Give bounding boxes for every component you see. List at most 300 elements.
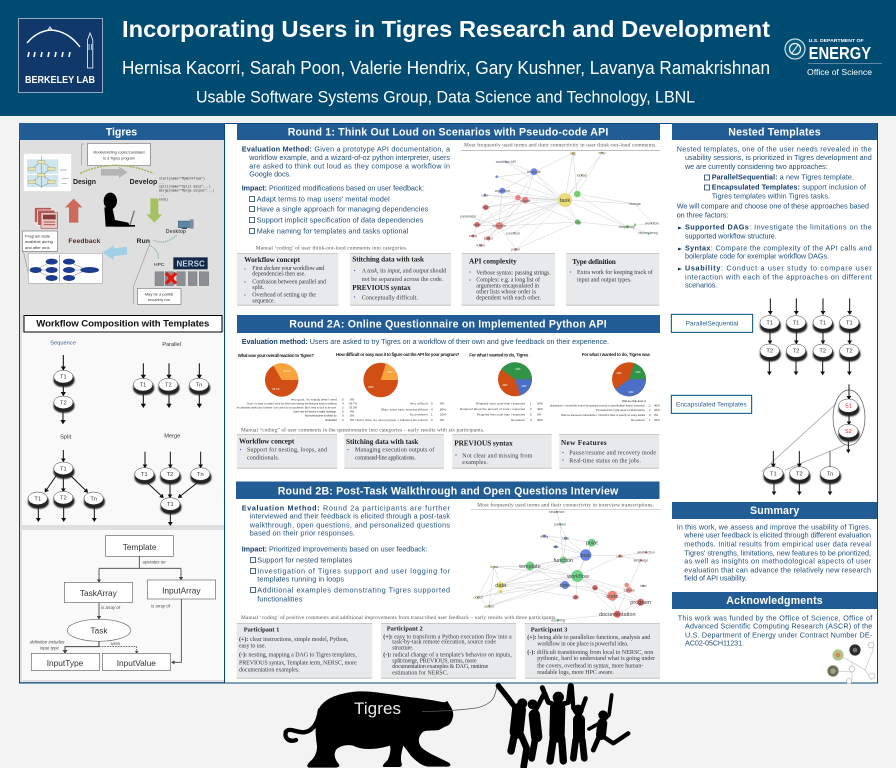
card: Type definition: Type definition xyxy=(572,258,616,266)
rope from tiger to users xyxy=(422,686,497,712)
text: impact 2B: Investigation of Tigres support and user logging for xyxy=(257,567,451,576)
text: impact 2B: Support for nested templates xyxy=(257,556,353,565)
chart: overall reaction pie: 0 xyxy=(342,418,344,422)
network graph: think-out-loud terms: workflow xyxy=(645,222,659,226)
relation: operates on: operates on xyxy=(143,559,166,564)
relation: definition includes input type: definition includes xyxy=(30,639,65,644)
pattern: Merge: T1 xyxy=(141,472,148,478)
chart: overall reaction pie: 0 xyxy=(342,410,344,414)
pattern: Encapsulated Templates: T1 xyxy=(770,471,777,477)
pattern: Split: Tn xyxy=(90,496,97,502)
box: ParallelSequential: ParallelSequential xyxy=(686,321,738,328)
text: nested templates intro: ParallelSequential: a new Tigres template. xyxy=(712,173,854,182)
heading: Round 2B: Round 2B: Post-Task Walkthrough and Open Questions Interview xyxy=(278,485,619,497)
text: impact: Have a single approach for managing dependencies xyxy=(257,205,429,214)
network graph: think-out-loud terms: example xyxy=(493,224,506,228)
code snippet: ... xyxy=(159,180,165,184)
heading: Round 2A xyxy=(237,315,660,333)
chart: code amount pie: 40% xyxy=(502,383,508,387)
chart: code amount pie: 40% xyxy=(537,418,543,422)
network graph: interview terms: template xyxy=(519,564,541,570)
card: Participant 2: (+): easy to transform a Python execution flow into a xyxy=(383,633,512,640)
chart: overall reaction pie: 0 xyxy=(342,414,344,418)
network graph: interview terms: code xyxy=(606,594,618,600)
text: funding statement: This work was funded by the Office of Science, Office of xyxy=(678,614,872,623)
network graph: think-out-loud terms: dependency xyxy=(639,231,658,235)
chart: abstraction level pie: Was too high-level of xyxy=(622,399,646,403)
chart: code amount pie: 1 xyxy=(530,402,532,406)
pattern: Merge xyxy=(135,433,211,525)
arrow: run to HPC xyxy=(149,245,158,259)
heading: Acknowledgments xyxy=(672,592,877,609)
card: Workflow concept 2A: conditionals. xyxy=(247,456,280,462)
text: nested templates intro: We will compare and choose one of these approaches based xyxy=(677,202,869,211)
text: comparison factors: scenarios. xyxy=(685,281,717,290)
card: Participant 2: Participant 2 xyxy=(387,625,423,632)
text: evaluation method 2B: interviewed and their feedback is elicited through a post-task xyxy=(250,512,450,521)
card: API complexity: other lists whose order is xyxy=(476,289,537,295)
chart: overall reaction pie: 0% xyxy=(350,398,355,402)
text: comparison factors: supported workflow structure. xyxy=(685,232,777,241)
chart: abstraction level pie: Was too low-level of abstraction: I should'nt have to specify so many details xyxy=(561,413,645,417)
text: evaluation method 2A: Evaluation method: Users are asked to try Tigres on a workflow of their own and give feedback on their experience. xyxy=(242,337,609,346)
text: impact 2B: Additional examples demonstrating Tigres supported xyxy=(257,586,450,595)
chart: API difficulty pie: Okay, some early learning difficult xyxy=(381,408,428,412)
network graph: think-out-loud terms: output xyxy=(520,199,530,203)
chart: overall reaction pie: 4 xyxy=(342,402,344,406)
chart: code amount pie: 20% xyxy=(537,402,543,406)
card: Workflow concept: dependencies then use. xyxy=(252,272,306,278)
text: impact 2B: functionalities xyxy=(257,594,303,603)
chart: API difficulty pie: 0% xyxy=(440,418,445,422)
label: Design: Design xyxy=(73,179,96,186)
card: Participant 1: PREVIOUS syntax, Template term, NERSC, more xyxy=(239,660,357,666)
chart: abstraction level pie: 40% xyxy=(654,408,660,412)
chart: code amount pie: 40% xyxy=(515,367,521,371)
text: impact 2B: templates running in loops xyxy=(257,575,344,584)
chart: code amount pie: 2 xyxy=(530,407,532,411)
network graph: interview terms: parallel xyxy=(554,522,566,526)
box: InputArray: InputArray xyxy=(162,585,201,595)
card: Participant 3: the covers, overhead in syntax, more human- xyxy=(537,664,643,670)
logo: U.S. Department of Energy: Office of Science xyxy=(807,67,872,77)
chart: API difficulty pie xyxy=(336,352,460,422)
chart: API difficulty pie: 1 xyxy=(431,412,433,416)
card: Workflow concept 2A: Workflow concept xyxy=(239,438,295,446)
relation: definition includes input type xyxy=(30,639,99,653)
chart: API difficulty pie: 0 xyxy=(431,402,433,406)
label: HPC: HPC xyxy=(154,262,165,268)
network graph: interview terms: function xyxy=(554,558,573,564)
card: Participant 3: readable logs, more HPC aware. xyxy=(537,670,614,676)
card: New Features 2A xyxy=(559,434,659,468)
code snippet: start(name="MyWorkflow") xyxy=(159,176,205,180)
person 3 xyxy=(542,686,570,761)
box: Encapsulated Templates xyxy=(671,395,752,413)
card: PREVIOUS syntax 2A xyxy=(452,434,552,468)
network graph: think-out-loud terms: parameter xyxy=(460,214,477,218)
network graph: think-out-loud terms: folder xyxy=(476,244,486,248)
title: Incorporating Users in Tigres Research and Development xyxy=(122,16,770,42)
person 2 xyxy=(528,695,543,758)
card: Workflow concept 2A: Support for nesting, loops, and xyxy=(247,447,327,454)
panel: Tigres left column xyxy=(19,123,224,683)
box: InputArray xyxy=(147,580,216,599)
icon: red failure cross xyxy=(166,273,176,284)
chart: overall reaction pie: Undecided xyxy=(325,418,337,422)
callout: partial recovery run: May be a partial xyxy=(145,292,173,297)
card: Workflow concept: sequence. xyxy=(252,299,276,305)
diagrams: composition patterns xyxy=(28,341,211,525)
chart: overall reaction pie: 0 xyxy=(342,398,344,402)
card: Workflow concept: Overhead of setting up the xyxy=(252,292,316,299)
network graph: interview terms: meaning xyxy=(551,618,565,622)
network graph: think-out-loud terms: change xyxy=(629,202,641,206)
chart: API difficulty pie: How difficult or easy was it to figure out the API for your program? xyxy=(336,352,460,357)
network graph: interview terms: user xyxy=(616,554,624,558)
chart: code amount pie: Required less code than I expected xyxy=(477,412,525,416)
arrow: feedback to design xyxy=(65,199,82,223)
card: New Features 2A: Real-time status on the jobs. xyxy=(569,458,642,464)
logo: NERSC xyxy=(173,257,208,269)
card: New Features 2A: Pause/resume and recovery mode xyxy=(569,451,656,457)
card: PREVIOUS syntax 2A: examples. xyxy=(462,460,488,466)
panel: Nested Templates xyxy=(671,123,877,495)
chart: code amount pie: For what I wanted to do, Tigres xyxy=(469,352,529,357)
caption: round 2A coding: Manual “coding” of user comments in the questionnaire into categories – early results with six participants. xyxy=(241,427,484,434)
text: evaluation method 2B: based on their prior responses. xyxy=(250,528,355,537)
chart: code amount pie: Required about the amount of code I expected xyxy=(460,407,525,411)
network graph: think-out-loud terms: entry xyxy=(469,234,477,238)
relation: uses: uses xyxy=(111,641,121,646)
card: API complexity: API complexity xyxy=(469,257,517,265)
pattern: ParallelSequential: T1 xyxy=(766,320,773,326)
chart: overall reaction pie: Good, I'm clear on what I need but there are missing few features and/or problems xyxy=(247,402,337,406)
network graph: think-out-loud terms: template xyxy=(527,170,541,174)
person 5 xyxy=(589,695,628,750)
text: evaluation method: Evaluation Method: Given a prototype API documentation, a xyxy=(242,144,450,153)
chart: abstraction level pie: 40% xyxy=(628,390,634,394)
network graph: interview terms: input xyxy=(490,565,498,569)
card: Participant 1: (-): nesting, mapping a DAG to Tigres templates, xyxy=(239,652,357,659)
card: Workflow concept 2A xyxy=(237,434,337,468)
relation: uses xyxy=(99,641,137,653)
pattern: ParallelSequential: T2 xyxy=(846,349,853,355)
label: Desktop: Desktop xyxy=(166,229,186,235)
text: summary body xyxy=(677,523,872,583)
chart: abstraction level pie: 0 xyxy=(649,413,651,417)
chart: overall reaction pie: 0% xyxy=(350,414,355,418)
chart: overall reaction pie: 33.3% xyxy=(349,406,358,410)
box: InputType xyxy=(31,653,100,670)
network graph: interview terms: rule xyxy=(553,545,559,549)
panel: Summary xyxy=(672,502,877,583)
chart: overall reaction pie: Very good, it's exactly what I need xyxy=(291,398,337,402)
text: summary body: In this work, we assess and improve the usability of Tigres, xyxy=(677,523,871,532)
network graph: think-out-loud terms: node xyxy=(473,223,481,227)
text: evaluation method: workflow example, and a wizard-of-oz python interpreter, users xyxy=(248,153,450,162)
chart: overall reaction pie xyxy=(237,353,358,422)
text: evaluation method: are asked to think out loud as they compose a workflow in xyxy=(249,161,450,170)
chart: API difficulty pie: I didn't write my own program, I followed the tutorial xyxy=(355,418,428,422)
illustration: tiger silhouette xyxy=(285,691,453,768)
pattern: ParallelSequential: T1 xyxy=(819,320,826,326)
network graph: think-out-loud terms: input xyxy=(482,206,490,210)
pattern: ParallelSequential: T1 xyxy=(846,320,853,326)
heading: Nested Templates xyxy=(672,123,877,140)
pattern: Sequence: T1 xyxy=(60,375,67,381)
person 4 xyxy=(572,686,586,758)
text: nested templates intro: we are currently considering two approaches: xyxy=(684,162,828,171)
network graph: interview terms: program xyxy=(630,600,651,606)
box: InputType: InputType xyxy=(47,658,84,668)
network graph: interview terms: new xyxy=(640,584,647,588)
heading: Round 1: Round 1: Think Out Loud on Scenarios with Pseudo-code API xyxy=(288,127,608,139)
network graph: think-out-loud terms: target xyxy=(484,236,493,240)
chart: API difficulty pie: 80% xyxy=(368,385,374,389)
chart: overall reaction pie: 66.7% xyxy=(349,402,358,406)
card: Participant 2: (-): radical change of a template's behavior on inputs, xyxy=(383,652,512,659)
network graph: think-out-loud terms: paper xyxy=(511,248,521,252)
card: Participant 1: Participant 1 xyxy=(244,626,279,633)
chart: abstraction level pie: 0% xyxy=(654,413,659,417)
text: comparison factors: Syntax: Compare the complexity of the API calls and xyxy=(685,244,872,253)
text: nested templates intro: Tigres templates within Tigres tasks. xyxy=(712,192,830,201)
network graph: think-out-loud terms: lookup xyxy=(577,173,587,177)
pattern: ParallelSequential: T2 xyxy=(819,349,826,355)
ellipse: Task xyxy=(67,619,131,641)
card: Participant 2 xyxy=(381,623,516,678)
code snippet: merge(name="Merge output"...) xyxy=(159,189,215,193)
network graph: interview terms xyxy=(471,502,660,622)
chart: abstraction level pie: 1 xyxy=(649,418,651,422)
chart: overall reaction pie: 0% xyxy=(350,418,355,422)
pattern: Merge: T1 xyxy=(167,502,174,508)
text: impact: Impact: Prioritized modifications based on user feedback: xyxy=(242,184,424,193)
text: evaluation method 2B: walkthrough, open questions, and personalized questions xyxy=(249,520,450,529)
callout: program state: available during xyxy=(25,239,53,244)
lifecycle picture: DAG sketch xyxy=(23,153,72,192)
chart: API difficulty pie: 0% xyxy=(440,402,445,406)
text: evaluation method 2B: Evaluation Method: Round 2a participants are further xyxy=(242,504,451,513)
heading: Acknowledgments: Acknowledgments xyxy=(726,595,823,607)
pattern: Sequence: T2 xyxy=(60,400,67,406)
text: funding statement: AC02-05CH11231. xyxy=(685,639,744,648)
pattern: Parallel xyxy=(133,342,210,407)
heading: Workflow Composition xyxy=(24,316,222,332)
relation: definition includes input type: input type xyxy=(40,645,59,650)
logo: NERSC: NERSC xyxy=(176,260,205,269)
card: Stitching data with task 2A: Stitching data with task xyxy=(346,438,418,446)
card: Workflow concept xyxy=(237,253,338,305)
card: Stitching data with task xyxy=(350,253,451,305)
chart: API difficulty pie: 80% xyxy=(440,408,446,412)
text: nested templates intro: Encapsulated Templates: support inclusion of xyxy=(712,183,866,192)
card: Stitching data with task: not be separated across the code. xyxy=(362,277,444,283)
network graph: think-out-loud terms: condition xyxy=(506,232,520,236)
label: Run: Run xyxy=(137,238,150,245)
pattern: ParallelSequential: T2 xyxy=(793,349,799,355)
text: funding statement: U.S. Department of Energy under Contract Number DE- xyxy=(685,631,873,640)
network graph: think-out-loud terms: frequently xyxy=(619,225,635,229)
network graph: think-out-loud terms: argument xyxy=(495,189,510,193)
card: Participant 1 xyxy=(237,623,372,678)
network graph: interview terms: Most frequently used terms and their connectivity in interview transcriptions. xyxy=(477,502,654,509)
code snippet: split(name="Split data"...) xyxy=(159,185,211,189)
card: Participant 3: Participant 3 xyxy=(531,626,567,633)
relation: is array of (task): is array of xyxy=(101,605,121,610)
heading: Round 2B xyxy=(236,482,660,499)
text: evaluation method: Google docs. xyxy=(249,170,291,179)
heading: Tigres: Tigres xyxy=(106,127,137,139)
network graph: interview terms: api xyxy=(593,586,598,590)
pattern: Parallel: T2 xyxy=(165,383,172,389)
network graph: interview terms: data xyxy=(495,583,507,589)
network graph: think-out-loud terms: flag xyxy=(575,220,581,224)
heading: Round 2A: Round 2A: Online Questionnaire on Implemented Python API xyxy=(289,319,607,331)
label: Feedback: Feedback xyxy=(68,238,101,245)
callout: program state xyxy=(22,231,58,273)
person 1 xyxy=(498,686,527,767)
pattern: Split: T1 xyxy=(34,496,41,502)
chart: overall reaction pie: 66.7% xyxy=(272,387,280,391)
pattern: Parallel: Tn xyxy=(196,383,202,389)
code snippet: end() xyxy=(159,197,169,201)
pattern: ParallelSequential: T1 xyxy=(793,320,799,326)
pattern: Encapsulated Templates xyxy=(762,384,865,495)
ellipse: Task: Task xyxy=(90,625,108,635)
card: PREVIOUS syntax 2A: Not clear and missing from xyxy=(462,452,533,459)
pattern: Split: T2 xyxy=(60,496,67,502)
box: Encapsulated Templates: Encapsulated Templates xyxy=(676,402,747,409)
card: Stitching data with task: A task, its input, and output should xyxy=(362,269,446,275)
chart: abstraction level pie: abstraction: I would like more fine-grained control or specification and/or execution xyxy=(550,404,645,408)
text: evaluation method xyxy=(242,144,450,179)
pattern: Encapsulated Templates: Tn xyxy=(827,471,833,477)
chart: abstraction level pie: 20% xyxy=(654,418,660,422)
card: Participant 2: split/merge, PREVIOUS, terms, more xyxy=(392,658,477,664)
network graph: interview terms: task xyxy=(581,553,591,559)
network graph: think-out-loud terms: tag xyxy=(570,152,576,156)
card: Participant 2: estimation for NERSC. xyxy=(392,669,449,676)
box: Template: Template xyxy=(123,542,157,552)
chart: API difficulty pie: 20% xyxy=(440,412,446,416)
panel: Round 2A xyxy=(237,315,660,468)
callout: program state: and after runs xyxy=(25,245,50,250)
chart: overall reaction pie: 0% xyxy=(350,410,355,414)
network graph: think-out-loud terms: map xyxy=(598,151,606,155)
chart: abstraction level pie: Provided the right level of abstraction xyxy=(596,408,645,412)
chart: API difficulty pie: No problems xyxy=(410,412,428,416)
card: Type definition: input and output types. xyxy=(577,277,632,283)
arrow: run to desktop xyxy=(153,235,177,242)
label: Tigres on tiger: Tigres xyxy=(354,699,401,718)
pattern: Parallel: Parallel xyxy=(162,342,181,348)
network graph: interview terms: array xyxy=(540,534,549,538)
chart: code amount pie: 0% xyxy=(537,412,542,416)
chart: code amount pie: 40% xyxy=(537,407,543,411)
network graph: interview terms: core xyxy=(562,537,569,541)
panel: Workflow Composition with Templates xyxy=(22,316,224,525)
text: impact: Make naming for templates and tasks optional xyxy=(257,227,409,236)
card: Stitching data with task 2A: Managing execution outputs of xyxy=(355,447,434,454)
text: nested templates intro: Nested templates, one of the user needs revealed in the xyxy=(677,144,872,153)
network graph: interview terms: abstraction xyxy=(637,551,655,555)
text: impact: Adapt terms to map users' mental model xyxy=(257,195,390,204)
chart: code amount pie: No opinion xyxy=(511,418,525,422)
arrow: develop to run xyxy=(146,198,162,223)
network graph: interview terms: time xyxy=(560,583,570,589)
network graph: think-out-loud terms: user xyxy=(482,193,489,197)
text: impact xyxy=(242,184,429,236)
box: InputValue: InputValue xyxy=(117,658,156,668)
label: Develop: Develop xyxy=(130,179,157,186)
chart: API difficulty pie: 20% xyxy=(387,370,393,374)
panel: Round 2B xyxy=(236,482,660,678)
header banner xyxy=(0,0,896,116)
pattern: Merge: Tn xyxy=(197,472,204,478)
icon: HPC server racks xyxy=(155,272,209,286)
network graph: think-out-loud terms: Most frequently used terms and their connectivity in user think-out-loud comments. xyxy=(464,142,657,149)
box: TaskArray: TaskArray xyxy=(80,588,118,598)
network graph: think-out-loud terms: task xyxy=(560,198,570,204)
card: Workflow concept: split. xyxy=(252,285,265,291)
chart: API difficulty pie: Very difficult xyxy=(410,402,428,406)
card: Stitching data with task: Stitching data with task xyxy=(352,256,424,264)
text: comparison factors: Supported DAGs: Investigate the limitations on the xyxy=(685,223,872,232)
affiliation: Usable Software Systems Group, Data Science and Technology, LBNL xyxy=(196,89,695,107)
text: impact: Support implicit specification of data dependencies xyxy=(257,216,424,225)
arc: design to develop xyxy=(80,165,153,173)
diagrams: nested template approaches xyxy=(671,298,865,495)
text: nested templates intro: on three factors: xyxy=(677,211,728,220)
logo: U.S. Department of Energy: ENERGY xyxy=(809,43,871,63)
logo: U.S. Department of Energy xyxy=(785,38,882,77)
relation: is array of (input) xyxy=(151,599,181,662)
pattern: Encapsulated Templates: S1 xyxy=(845,404,852,410)
text: summary body: evaluation that can advance the relatively new research xyxy=(684,566,871,575)
lifecycle picture: executed workflow xyxy=(28,253,102,283)
panel: Round 1 xyxy=(237,124,660,305)
chart: abstraction level pie: 2 xyxy=(649,404,651,408)
card: Workflow concept: First declare your workflow and xyxy=(252,265,324,272)
pattern: Split xyxy=(28,434,104,521)
card: New Features 2A: New Features xyxy=(561,439,607,447)
pattern: Parallel: T1 xyxy=(140,383,146,389)
pattern: Merge: Merge xyxy=(164,433,180,439)
pattern: Encapsulated Templates: S2 xyxy=(845,429,852,435)
card: PREVIOUS syntax 2A: PREVIOUS syntax xyxy=(454,440,513,448)
pattern: Merge: T2 xyxy=(167,472,173,478)
card: Participant 2: documentation examples & DAG, runtime xyxy=(392,664,489,670)
arrow: run to feedback xyxy=(102,245,127,260)
chart: overall reaction pie: What was your overall reaction to Tigres? xyxy=(238,353,314,358)
logo: Berkeley Lab: BERKELEY LAB xyxy=(25,75,95,86)
text: nested templates intro: usability sessions, is prioritized in Tigres development and xyxy=(685,153,872,162)
network graph: interview terms: object xyxy=(474,596,483,600)
card: Participant 1: (+): clear instructions, simple model, Python, xyxy=(239,636,349,643)
text: summary body: methods. Initial results from empirical user data reveal xyxy=(684,540,871,549)
chart: overall reaction pie: Not sure/unclear to what I do xyxy=(305,414,337,418)
arrow: design to develop xyxy=(101,167,128,178)
diagram: Tigres class model xyxy=(22,530,224,680)
text: funding statement: Advanced Scientific Computing Research (ASCR) of the xyxy=(685,622,872,631)
chart: abstraction level pie: 40% xyxy=(654,404,660,408)
box: Template xyxy=(106,536,173,556)
card: Participant 3: (+): being able to parallelize functions, analysis and xyxy=(527,634,650,641)
card: Stitching data with task: PREVIOUS syntax xyxy=(352,284,411,292)
pattern: Split: T1 xyxy=(60,466,67,472)
